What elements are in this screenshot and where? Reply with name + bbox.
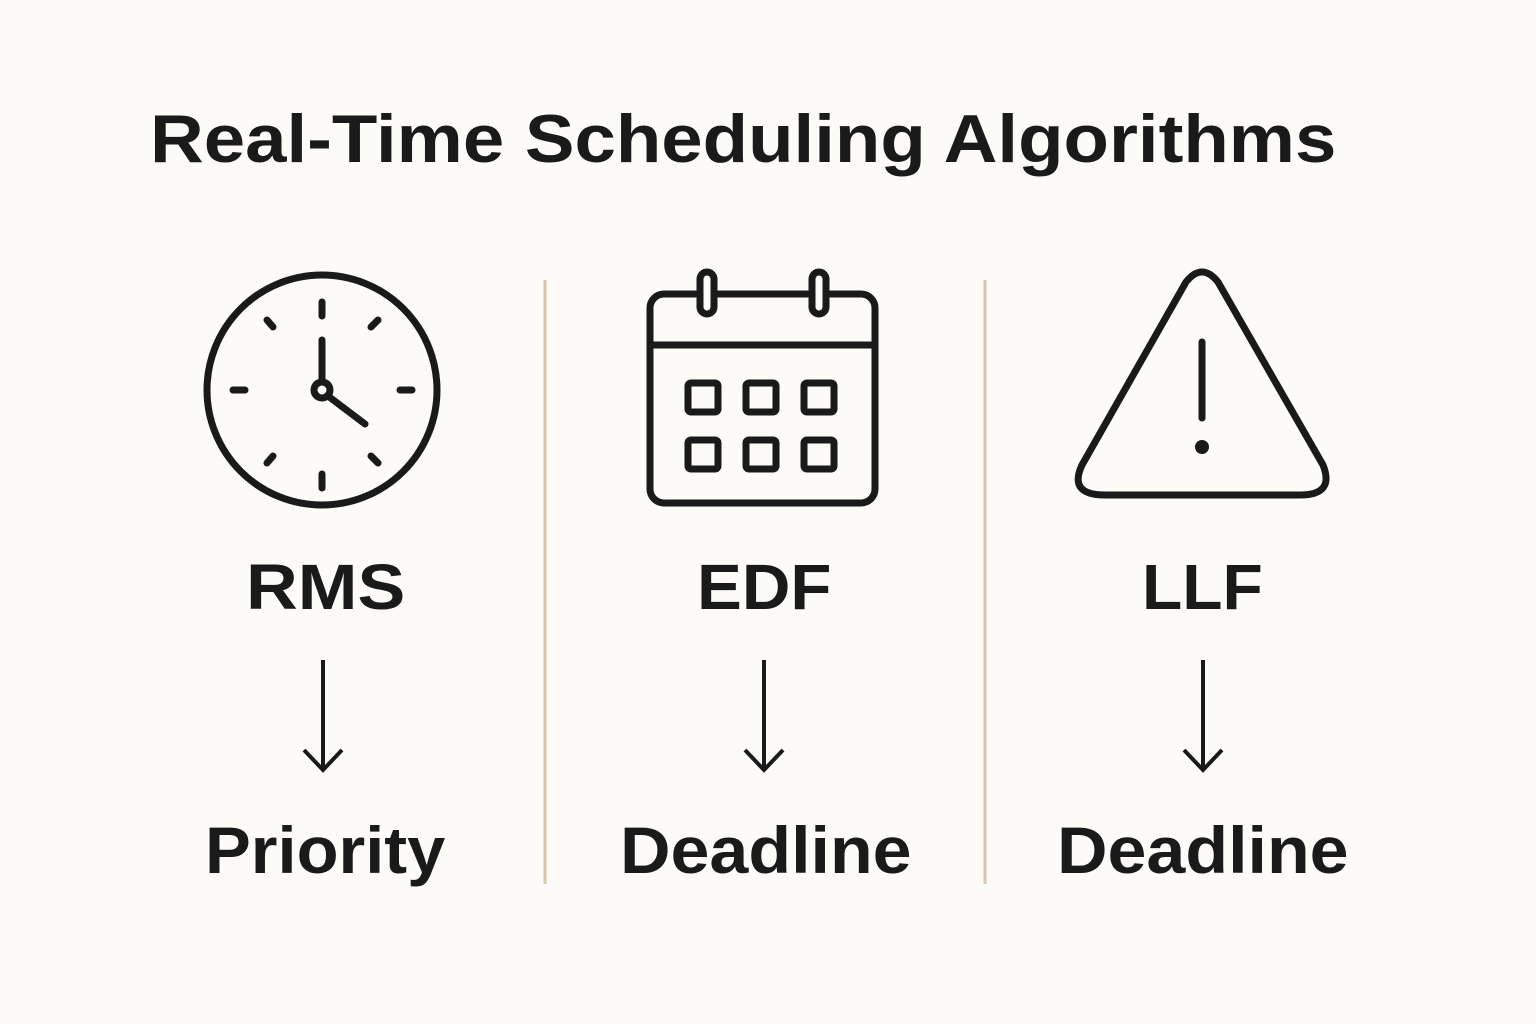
label: EDF: EDF <box>697 551 831 623</box>
label: LLF: LLF <box>1142 551 1263 623</box>
icon: calendar <box>646 268 878 506</box>
icon: warning <box>1074 268 1330 498</box>
arrow <box>302 660 344 773</box>
panel: EDF <box>620 268 912 887</box>
title: Real-Time Scheduling Algorithms <box>150 101 1336 177</box>
icon: clock <box>204 272 440 508</box>
label: Deadline: Deadline <box>620 813 912 887</box>
label: Priority: Priority <box>205 813 445 887</box>
panel: LLF <box>1057 268 1349 887</box>
arrow <box>1182 660 1224 773</box>
panel: RMS <box>204 272 445 887</box>
label: RMS: RMS <box>246 551 405 623</box>
arrow <box>744 660 784 773</box>
label: Deadline: Deadline <box>1057 813 1349 887</box>
